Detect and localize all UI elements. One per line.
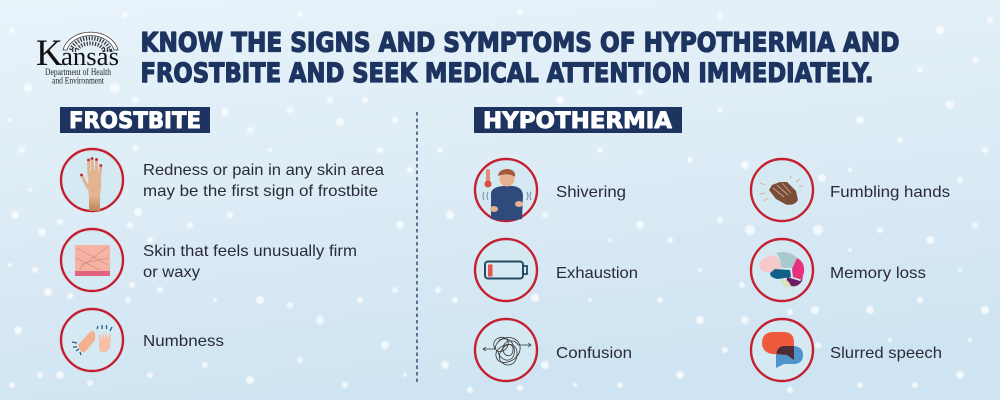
text: redness bbox=[143, 162, 384, 200]
text: redness: Redness or pain in any skin area bbox=[143, 162, 384, 179]
icon: brain bbox=[751, 239, 813, 301]
icon: speech bubbles bbox=[751, 319, 813, 381]
title: FROSTBITE AND SEEK MEDICAL ATTENTION IMMEDIATELY. bbox=[140, 58, 874, 89]
icon: hand with redness bbox=[61, 149, 123, 211]
icon: low battery bbox=[475, 239, 537, 301]
text: exhaustion: Exhaustion bbox=[556, 265, 638, 282]
text: shivering: Shivering bbox=[556, 184, 626, 201]
heading: Frostbite: FROSTBITE bbox=[69, 109, 201, 134]
text: slurred speech: Slurred speech bbox=[830, 345, 942, 362]
logo: Kansas Department of Health and Environment bbox=[36, 32, 119, 86]
icon: fumbling hands bbox=[751, 159, 813, 221]
icon: shivering person bbox=[475, 159, 537, 221]
text: numbness: Numbness bbox=[143, 333, 224, 350]
heading: Hypothermia: HYPOTHERMIA bbox=[483, 109, 672, 134]
logo: Kansas Department of Health and Environment: K bbox=[36, 33, 63, 74]
title: KNOW THE SIGNS AND SYMPTOMS OF HYPOTHERMIA AND bbox=[140, 28, 900, 58]
text: fumbling hands: Fumbling hands bbox=[830, 184, 950, 201]
icon: tangled line bbox=[475, 319, 537, 381]
text: waxy skin bbox=[143, 243, 357, 281]
divider line bbox=[416, 112, 418, 382]
text: waxy skin: or waxy bbox=[143, 264, 200, 281]
logo: Kansas Department of Health and Environment: Department of Health bbox=[45, 67, 111, 77]
text: waxy skin: Skin that feels unusually firm bbox=[143, 243, 357, 260]
icon: numb hands bbox=[61, 309, 123, 371]
title bbox=[140, 28, 900, 89]
icon: waxy skin bbox=[61, 229, 123, 291]
text: memory loss: Memory loss bbox=[830, 265, 926, 282]
logo: Kansas Department of Health and Environment: and Environment bbox=[52, 76, 104, 86]
text: confusion: Confusion bbox=[556, 345, 632, 362]
text: redness: may be the first sign of frostbite bbox=[143, 183, 378, 200]
logo: Kansas Department of Health and Environment: ansas bbox=[61, 42, 119, 71]
